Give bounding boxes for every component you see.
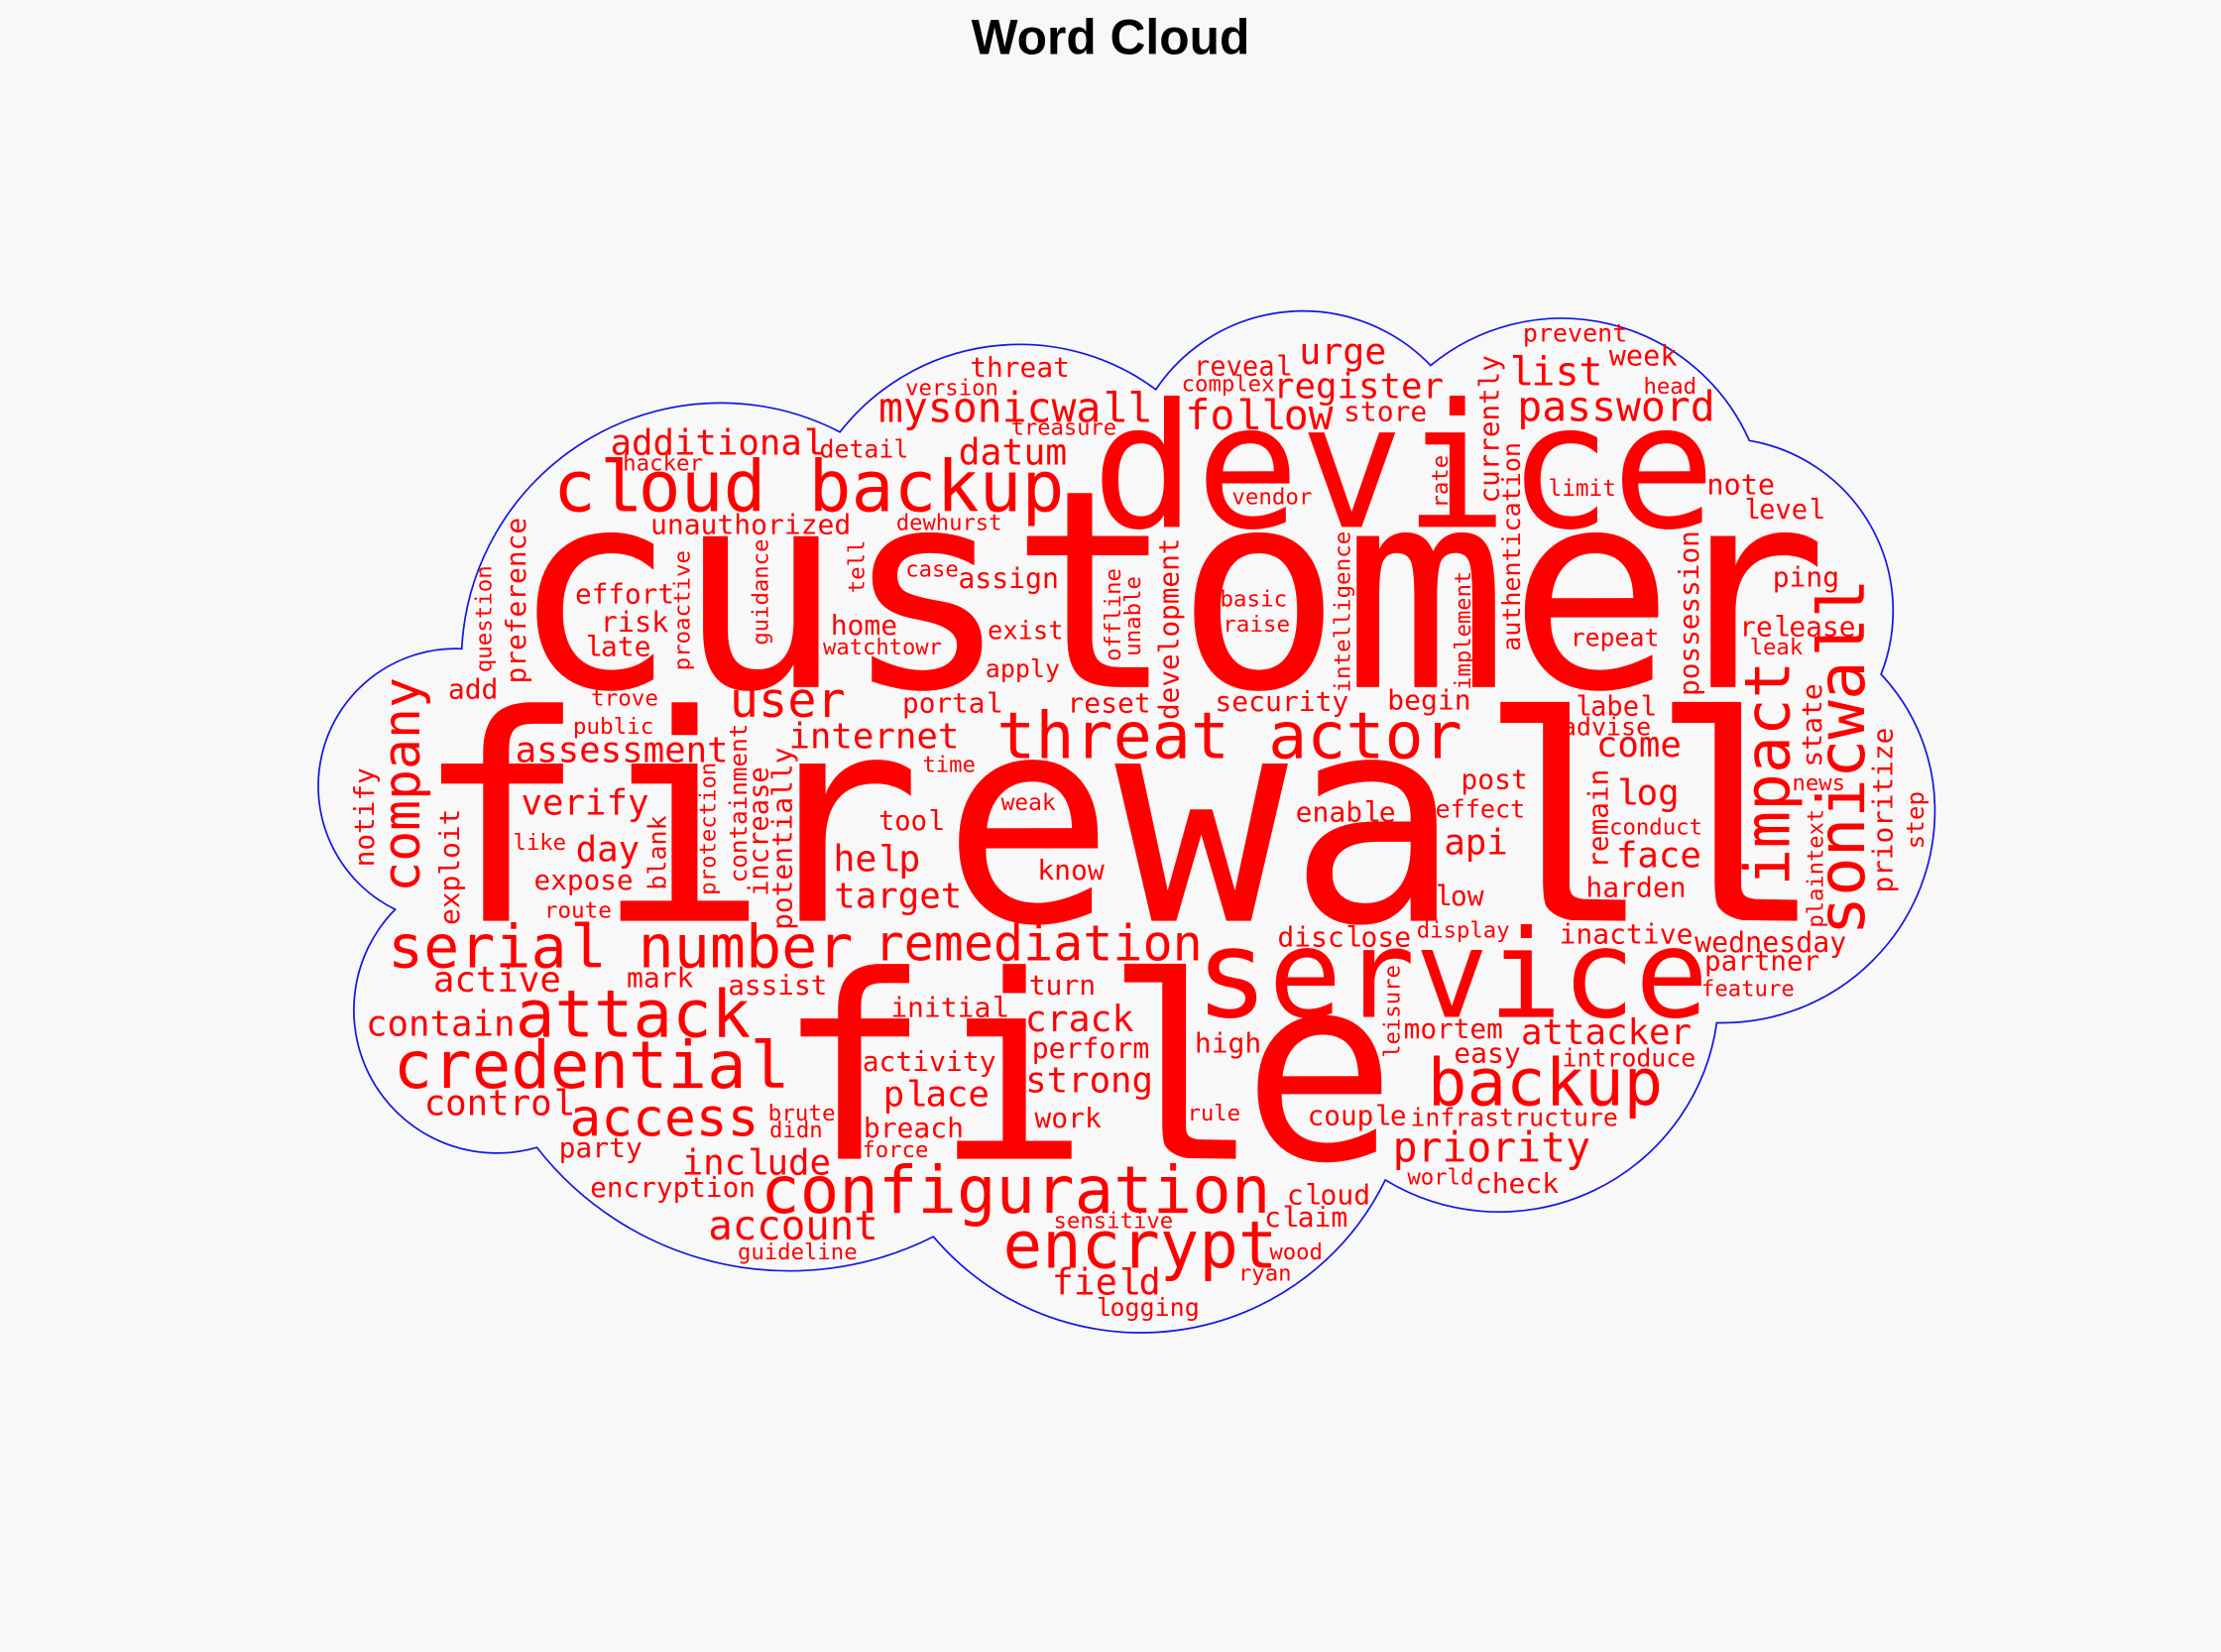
medium and small words: activity xyxy=(863,1045,996,1078)
medium and small words: rate xyxy=(1428,455,1454,509)
medium and small words: store xyxy=(1344,395,1427,427)
medium and small words: blank xyxy=(643,815,671,890)
word: file: file xyxy=(776,921,1397,1240)
medium and small words: assessment xyxy=(516,731,729,771)
medium and small words: possession xyxy=(1673,531,1705,696)
medium and small words: sensitive xyxy=(1054,1209,1173,1235)
medium and small words: feature xyxy=(1701,976,1795,1002)
medium and small words: disclose xyxy=(1277,920,1411,955)
medium and small words: head xyxy=(1643,374,1696,400)
medium and small words: logging xyxy=(1096,1293,1200,1324)
medium and small words: strong xyxy=(1025,1060,1153,1101)
medium and small words: risk xyxy=(601,605,668,639)
medium and small words: register xyxy=(1273,366,1444,407)
medium and small words: note xyxy=(1706,468,1775,502)
word: credential: credential xyxy=(394,1028,785,1109)
medium and small words: dewhurst xyxy=(896,510,1001,535)
medium and small words: perform xyxy=(1032,1032,1149,1065)
medium and small words: unauthorized xyxy=(650,509,851,541)
medium and small words: active xyxy=(433,960,561,1001)
medium and small words: apply xyxy=(986,654,1060,683)
medium and small words: raise xyxy=(1223,612,1290,638)
medium and small words: prevent xyxy=(1523,318,1627,347)
medium and small words: log xyxy=(1615,772,1680,816)
medium and small words: place xyxy=(883,1075,990,1119)
medium and small words: expose xyxy=(534,864,634,896)
medium and small words: inactive xyxy=(1560,917,1693,950)
medium and small words: version xyxy=(905,376,998,402)
medium and small words: add xyxy=(448,672,498,705)
medium and small words: guidance xyxy=(748,539,773,646)
medium and small words: mark xyxy=(627,962,694,995)
word: serial number: serial number xyxy=(388,913,853,987)
medium and small words: label xyxy=(1575,691,1655,724)
medium and small words: low xyxy=(1434,880,1484,914)
medium and small words: wood xyxy=(1269,1239,1323,1265)
word: attack: attack xyxy=(516,978,751,1053)
cloud outline xyxy=(318,311,1934,1333)
medium and small words: encryption xyxy=(590,1171,756,1204)
medium and small words: post xyxy=(1461,764,1528,796)
medium and small words: priority xyxy=(1393,1123,1590,1171)
medium and small words: didn xyxy=(769,1118,823,1143)
medium and small words: mysonicwall xyxy=(878,385,1150,436)
medium and small words: display xyxy=(1417,918,1510,944)
medium and small words: proactive xyxy=(670,550,696,670)
medium and small words: additional xyxy=(610,423,823,467)
medium and small words: password xyxy=(1517,383,1715,430)
medium and small words: begin xyxy=(1387,684,1471,717)
medium and small words: weak xyxy=(1001,790,1056,816)
medium and small words: advise xyxy=(1562,712,1651,741)
medium and small words: protection xyxy=(695,763,721,895)
medium and small words: guideline xyxy=(738,1239,858,1265)
medium and small words: authentication xyxy=(1497,442,1526,651)
medium and small words: development xyxy=(1153,538,1186,720)
medium and small words: leisure xyxy=(1379,965,1405,1058)
medium and small words: repeat xyxy=(1571,623,1659,651)
medium and small words xyxy=(348,318,1929,1324)
medium and small words: account xyxy=(708,1202,878,1249)
word: sonicwall: sonicwall xyxy=(1805,583,1885,935)
medium and small words: remediation xyxy=(875,915,1203,973)
medium and small words: mortem xyxy=(1404,1012,1503,1045)
medium and small words: introduce xyxy=(1563,1044,1695,1073)
medium and small words: contain xyxy=(366,1003,516,1044)
word cloud xyxy=(348,318,1929,1324)
medium and small words: reveal xyxy=(1194,352,1291,385)
medium and small words: offline xyxy=(1101,568,1126,661)
medium and small words: currently xyxy=(1472,355,1505,504)
medium and small words: intelligence xyxy=(1330,531,1355,693)
medium and small words: breach xyxy=(864,1112,964,1144)
medium and small words: exist xyxy=(988,615,1064,645)
word: firewall: firewall xyxy=(413,655,1805,1012)
medium and small words: threat xyxy=(970,351,1070,384)
medium and small words: enable xyxy=(1296,796,1396,831)
word: company: company xyxy=(373,677,432,892)
medium and small words: trove xyxy=(591,685,658,711)
medium and small words: user xyxy=(730,673,846,729)
medium and small words: basic xyxy=(1220,586,1287,612)
medium and small words: increase xyxy=(744,767,774,896)
medium and small words: public xyxy=(573,714,653,740)
medium and small words: cloud xyxy=(1287,1178,1370,1213)
medium and small words: watchtowr xyxy=(823,635,942,660)
medium and small words: know xyxy=(1037,854,1105,886)
medium and small words: vendor xyxy=(1231,485,1312,511)
medium and small words: effect xyxy=(1435,794,1525,823)
medium and small words: limit xyxy=(1549,476,1616,502)
medium and small words: initial xyxy=(890,992,1007,1026)
medium and small words: couple xyxy=(1308,1099,1407,1133)
medium and small words: leak xyxy=(1750,635,1804,660)
word: encrypt: encrypt xyxy=(1003,1209,1277,1284)
medium and small words: partner xyxy=(1704,945,1819,978)
title: Word Cloud xyxy=(972,9,1249,64)
medium and small words: conduct xyxy=(1609,814,1702,840)
medium and small words: reset xyxy=(1067,687,1151,720)
medium and small words: notify xyxy=(348,767,381,867)
medium and small words: complex xyxy=(1182,371,1274,397)
word: device: device xyxy=(1092,367,1715,568)
medium and small words: implement xyxy=(1451,571,1476,690)
medium and small words: treasure xyxy=(1011,415,1116,441)
medium and small words: security xyxy=(1215,685,1348,718)
medium and small words: urge xyxy=(1299,330,1386,373)
medium and small words: remain xyxy=(1581,769,1614,869)
medium and small words: infrastructure xyxy=(1410,1104,1618,1132)
medium and small words: field xyxy=(1052,1261,1161,1307)
medium and small words: tool xyxy=(878,806,943,839)
medium and small words: question xyxy=(472,565,498,672)
medium and small words: day xyxy=(576,830,640,871)
medium and small words: ryan xyxy=(1238,1260,1292,1286)
medium and small words: like xyxy=(513,830,566,856)
medium and small words: case xyxy=(905,556,959,582)
medium and small words: high xyxy=(1195,1026,1261,1059)
medium and small words: claim xyxy=(1264,1201,1347,1236)
word: cloud backup: cloud backup xyxy=(553,446,1064,534)
medium and small words: prioritize xyxy=(1867,728,1900,893)
medium and small words: party xyxy=(559,1131,643,1164)
medium and small words: exploit xyxy=(433,809,466,925)
medium and small words: help xyxy=(833,838,920,884)
medium and small words: detail xyxy=(820,434,908,463)
medium and small words: check xyxy=(1475,1167,1559,1200)
medium and small words: home xyxy=(831,609,897,642)
medium and small words: brute xyxy=(768,1101,836,1126)
medium and small words: containment xyxy=(724,724,753,883)
medium and small words: unable xyxy=(1120,576,1146,656)
medium and small words: rule xyxy=(1187,1101,1240,1126)
word: threat actor: threat actor xyxy=(996,699,1462,773)
medium and small words: list xyxy=(1508,350,1603,399)
medium and small words: step xyxy=(1901,791,1929,849)
medium and small words: come xyxy=(1596,725,1682,766)
medium and small words: face xyxy=(1616,835,1701,876)
medium and small words: late xyxy=(584,630,651,664)
medium and small words: follow xyxy=(1185,392,1334,443)
medium and small words: attacker xyxy=(1521,1012,1692,1053)
medium and small words: force xyxy=(862,1137,928,1163)
word: impact: impact xyxy=(1731,660,1804,886)
medium and small words: week xyxy=(1609,339,1678,373)
word: configuration: configuration xyxy=(760,1153,1270,1229)
medium and small words: include xyxy=(682,1142,831,1186)
word: backup: backup xyxy=(1428,1045,1663,1121)
medium and small words: verify xyxy=(522,782,648,823)
medium and small words: work xyxy=(1034,1102,1102,1134)
medium and small words: turn xyxy=(1029,969,1096,1002)
medium and small words: route xyxy=(544,898,612,924)
medium and small words: preference xyxy=(500,518,532,684)
medium and small words: hacker xyxy=(623,450,703,476)
medium and small words: tell xyxy=(844,540,870,593)
medium and small words: news xyxy=(1792,770,1845,796)
medium and small words: harden xyxy=(1585,871,1687,903)
medium and small words: easy xyxy=(1454,1036,1521,1069)
word: service: service xyxy=(1195,904,1708,1046)
medium and small words: assign xyxy=(958,562,1059,595)
medium and small words: access xyxy=(570,1089,759,1149)
word: customer: customer xyxy=(511,430,1828,753)
medium and small words: control xyxy=(424,1083,573,1126)
medium and small words: target xyxy=(834,877,962,917)
medium and small words: time xyxy=(922,753,976,778)
medium and small words: crack xyxy=(1025,998,1133,1040)
medium and small words: wednesday xyxy=(1695,926,1846,959)
medium and small words: release xyxy=(1739,610,1855,645)
medium and small words: state xyxy=(1796,683,1828,767)
medium and small words: level xyxy=(1743,495,1823,528)
medium and small words: plaintext xyxy=(1804,809,1829,928)
medium and small words: assist xyxy=(728,969,827,1002)
medium and small words: datum xyxy=(959,431,1067,474)
medium and small words: effort xyxy=(575,578,674,611)
medium and small words: ping xyxy=(1773,560,1839,593)
medium and small words: potentially xyxy=(766,748,799,930)
medium and small words: api xyxy=(1444,822,1508,863)
medium and small words: internet xyxy=(788,716,959,757)
medium and small words: portal xyxy=(902,687,1001,722)
medium and small words: world xyxy=(1407,1164,1473,1190)
